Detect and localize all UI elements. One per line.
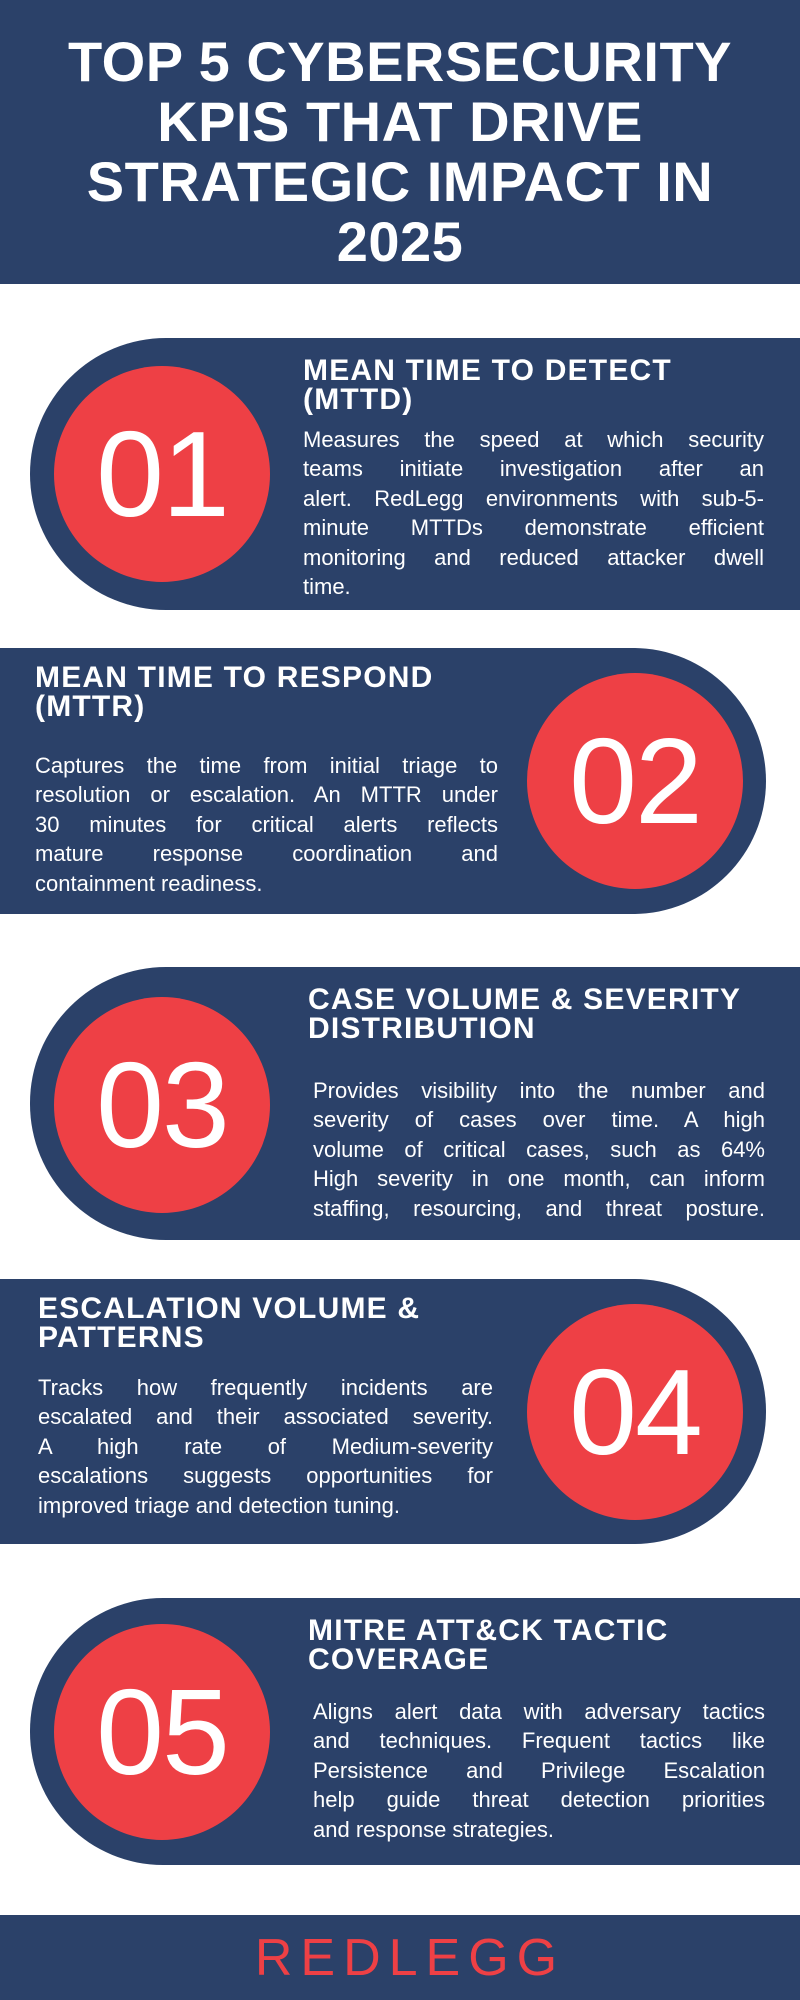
text 04 [38, 1375, 493, 1518]
text 05: help guide threat detection priorities [313, 1787, 765, 1812]
number circle 01: 01 [96, 406, 228, 542]
number circle 04: 04 [569, 1344, 701, 1480]
logo: REDLEGG: REDLEGG [255, 1929, 565, 1987]
text 05: and techniques. Frequent tactics like [313, 1728, 765, 1753]
text 04: A high rate of Medium-severity [38, 1434, 493, 1459]
text 01: minute MTTDs demonstrate efficient [303, 515, 764, 540]
text 05: Persistence and Privilege Escalation [313, 1758, 765, 1783]
number circle 04 [527, 1304, 743, 1520]
text 04: Tracks how frequently incidents are [38, 1375, 493, 1400]
text 04: escalated and their associated severity. [38, 1404, 493, 1429]
number circle 03 [54, 997, 270, 1213]
title: 2025 [337, 210, 463, 273]
text 02 [35, 753, 498, 896]
text 03: volume of critical cases, such as 64% [313, 1137, 765, 1162]
text 01: monitoring and reduced attacker dwell [303, 545, 764, 570]
title: KPIS THAT DRIVE [157, 90, 643, 153]
number circle 05 [54, 1624, 270, 1840]
heading 05: COVERAGE [308, 1643, 489, 1676]
title [68, 30, 732, 273]
panel: 02 MTTR [0, 648, 766, 914]
heading 03: CASE VOLUME & SEVERITY [308, 983, 741, 1016]
heading 01: (MTTD) [303, 383, 414, 416]
heading 03 [308, 983, 741, 1045]
heading 01: MEAN TIME TO DETECT [303, 354, 672, 387]
heading 04: PATTERNS [38, 1321, 205, 1354]
number circle 02: 02 [569, 713, 701, 849]
heading 02: MEAN TIME TO RESPOND [35, 661, 433, 694]
text 01: alert. RedLegg environments with sub-5- [303, 486, 764, 511]
text 02: resolution or escalation. An MTTR under [35, 782, 498, 807]
text 02: mature response coordination and [35, 841, 498, 866]
panel: 03 case volume [30, 967, 800, 1240]
number circle 01 [54, 366, 270, 582]
text 05: and response strategies. [313, 1817, 554, 1842]
panel: 01 MTTD [30, 338, 800, 610]
heading 02 [35, 661, 433, 723]
text 02: 30 minutes for critical alerts reflects [35, 812, 498, 837]
text 05 [313, 1699, 765, 1842]
number circle 03: 03 [96, 1037, 228, 1173]
text 05: Aligns alert data with adversary tactics [313, 1699, 765, 1724]
text 03: Provides visibility into the number and [313, 1078, 765, 1103]
number circle 02 [527, 673, 743, 889]
header band [0, 0, 800, 284]
text 02: containment readiness. [35, 871, 262, 896]
text 03: High severity in one month, can inform [313, 1166, 765, 1191]
panel: 04 escalation [0, 1279, 766, 1544]
text 03 [313, 1078, 765, 1221]
number circle 05: 05 [96, 1664, 228, 1800]
text 04: improved triage and detection tuning. [38, 1493, 400, 1518]
title: STRATEGIC IMPACT IN [87, 150, 713, 213]
heading 05: MITRE ATT&CK TACTIC [308, 1614, 669, 1647]
heading 04 [38, 1292, 420, 1354]
heading 04: ESCALATION VOLUME & [38, 1292, 420, 1325]
heading 03: DISTRIBUTION [308, 1012, 536, 1045]
text 02: Captures the time from initial triage to [35, 753, 498, 778]
title: TOP 5 CYBERSECURITY [68, 30, 732, 93]
text 01 [303, 427, 764, 599]
text 03: severity of cases over time. A high [313, 1107, 765, 1132]
text 01: time. [303, 574, 351, 599]
heading 05 [308, 1614, 669, 1676]
text 01: teams initiate investigation after an [303, 456, 764, 481]
text 04: escalations suggests opportunities for [38, 1463, 493, 1488]
heading 02: (MTTR) [35, 690, 146, 723]
panel: 05 MITRE [30, 1598, 800, 1865]
text 03: staffing, resourcing, and threat posture. [313, 1196, 765, 1221]
text 01: Measures the speed at which security [303, 427, 764, 452]
footer band [0, 1915, 800, 2000]
heading 01 [303, 354, 672, 416]
